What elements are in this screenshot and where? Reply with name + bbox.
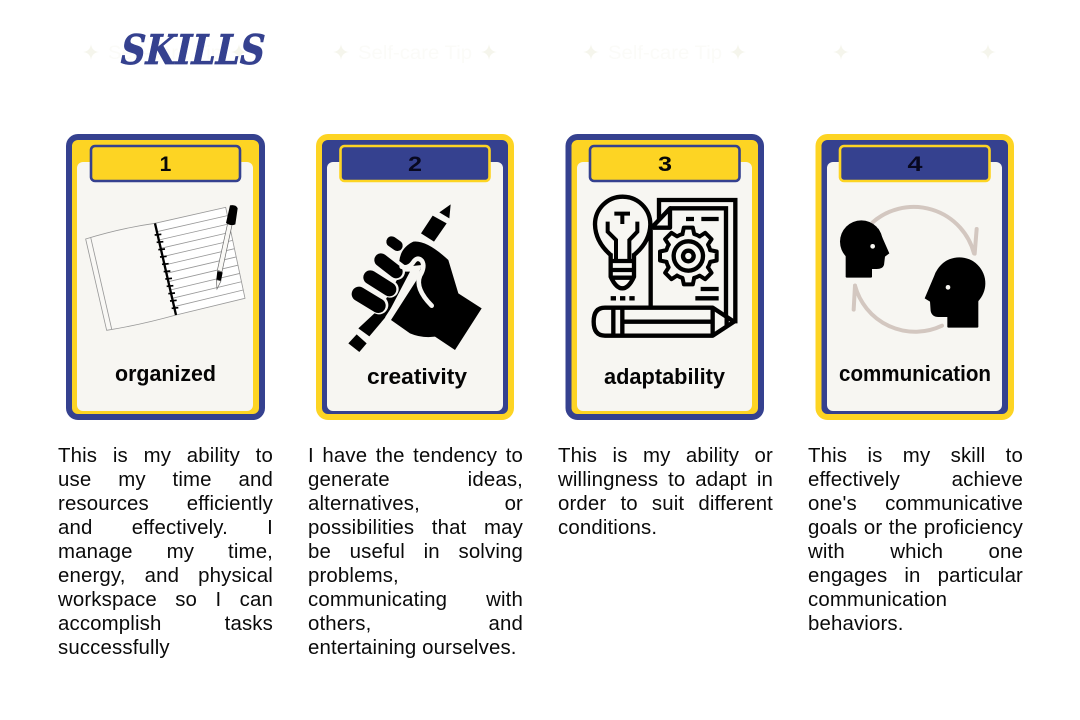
text block: organized description: accomplish tasks bbox=[58, 612, 273, 634]
text block: adaptability description: conditions. bbox=[558, 516, 657, 538]
panel: card 2 creativity bbox=[319, 137, 511, 417]
number tab 2 bbox=[340, 146, 490, 181]
text block: organized description: This is my ability to bbox=[58, 444, 273, 466]
text block: adaptability description: willingness to adapt in bbox=[558, 468, 773, 490]
text block: communication description: engages in particular bbox=[808, 564, 1023, 586]
text block: organized description: energy, and physical bbox=[58, 564, 273, 586]
text block: creativity description: entertaining ourselves. bbox=[308, 636, 517, 658]
text block: organized description: use my time and bbox=[58, 468, 273, 490]
icon: two heads exchanging arrows bbox=[840, 207, 985, 332]
text block: creativity description: I have the tendency to bbox=[308, 444, 523, 466]
text block: communication description: behaviors. bbox=[808, 612, 904, 634]
label: organized: organized bbox=[115, 361, 216, 386]
faint background labels: Self-care Tip bbox=[108, 43, 222, 64]
text block: organized description bbox=[58, 444, 273, 658]
faint background labels bbox=[83, 43, 996, 64]
number tab 4 bbox=[840, 146, 990, 181]
text block: creativity description: alternatives, or bbox=[308, 492, 523, 514]
text block: communication description: effectively achieve bbox=[808, 468, 1023, 490]
text block: communication description: with which one bbox=[808, 540, 1023, 562]
faint background labels: Self-care Tip bbox=[608, 43, 722, 64]
text block: creativity description: be useful in solving bbox=[308, 540, 523, 562]
text block: organized description: and effectively. I bbox=[58, 516, 273, 538]
text block: creativity description: communicating with bbox=[308, 588, 523, 610]
panel: card 4 communication bbox=[818, 137, 1011, 417]
text block: communication description: goals or the proficiency bbox=[808, 516, 1023, 538]
icon: bulb, gear document and pencil bbox=[594, 197, 735, 336]
number tab 3: 3 bbox=[658, 153, 672, 176]
icon: hand holding pencil bbox=[348, 204, 482, 352]
number tab 2: 2 bbox=[408, 153, 422, 176]
number tab 1: 1 bbox=[160, 153, 172, 176]
text block: communication description: This is my skill to bbox=[808, 444, 1023, 466]
panel: card 3 adaptability bbox=[568, 137, 761, 417]
text block: creativity description: others, and bbox=[308, 612, 523, 634]
text block: organized description: resources efficiently bbox=[58, 492, 273, 514]
text block: organized description: workspace so I can bbox=[58, 588, 273, 610]
text block: adaptability description bbox=[558, 444, 773, 538]
text block: communication description: communication bbox=[808, 588, 947, 610]
panel: card 1 organized bbox=[69, 137, 262, 417]
icon: notebook and pen bbox=[86, 205, 245, 330]
text block: adaptability description: This is my ability or bbox=[558, 444, 773, 466]
text block: organized description: manage my time, bbox=[58, 540, 273, 562]
title: SKILLS bbox=[116, 25, 270, 74]
number tab 1 bbox=[91, 146, 240, 181]
label: creativity: creativity bbox=[367, 364, 468, 389]
text block: creativity description: problems, bbox=[308, 564, 399, 586]
text block: communication description: one's communicative bbox=[808, 492, 1023, 514]
number tab 3 bbox=[590, 146, 740, 181]
text block: adaptability description: order to suit different bbox=[558, 492, 773, 514]
label: adaptability: adaptability bbox=[604, 364, 726, 389]
text block: creativity description: possibilities that may bbox=[308, 516, 523, 538]
text block: creativity description: generate ideas, bbox=[308, 468, 523, 490]
text block: creativity description bbox=[308, 444, 523, 658]
text block: organized description: successfully bbox=[58, 636, 170, 658]
label: communication: communication bbox=[839, 361, 991, 386]
number tab 4: 4 bbox=[908, 153, 923, 176]
faint background labels: Self-care Tip bbox=[358, 43, 472, 64]
text block: communication description bbox=[808, 444, 1023, 634]
